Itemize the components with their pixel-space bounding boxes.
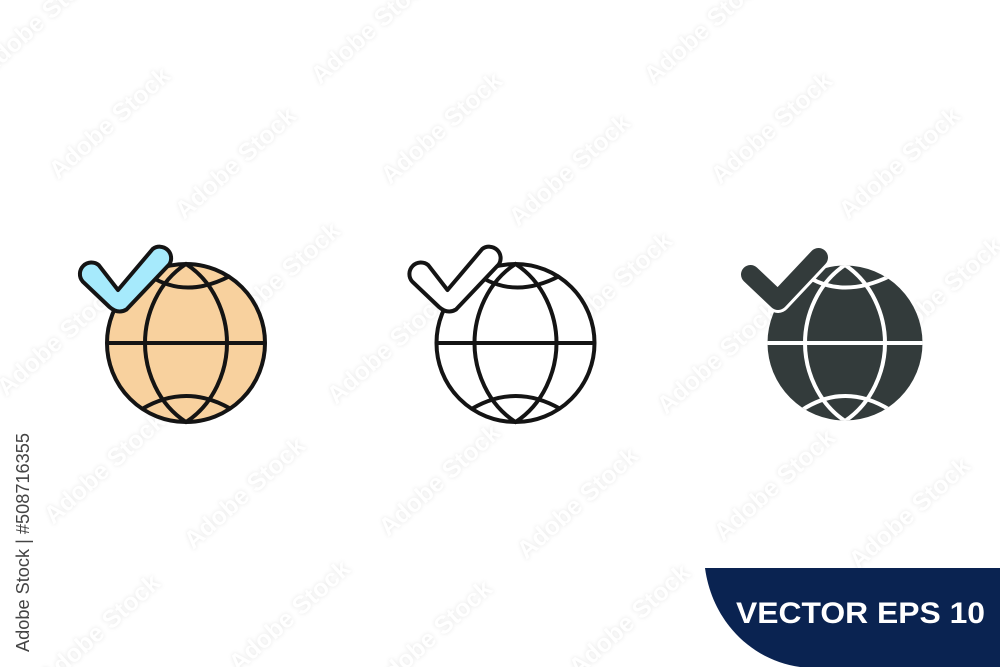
banner: vector eps 10: [705, 568, 1000, 667]
icon: solid globe with check mark: [750, 258, 925, 421]
text: Adobe Stock: [39, 406, 171, 530]
text: Adobe Stock: [652, 296, 784, 420]
text: Adobe Stock: [834, 101, 966, 225]
stock id side label: Adobe Stock | #508716355: [12, 433, 33, 652]
text: Adobe Stock: [214, 216, 346, 340]
text: Adobe Stock: [374, 418, 506, 542]
text: Adobe Stock: [709, 423, 841, 547]
text: Adobe Stock: [844, 451, 976, 575]
text: Adobe Stock: [322, 286, 454, 410]
text: Adobe Stock: [44, 61, 176, 185]
icon: outline globe with check mark: [409, 247, 594, 422]
banner: vector eps 10: VECTOR EPS 10: [736, 597, 985, 630]
text: Adobe Stock: [504, 108, 636, 232]
text: Adobe Stock: [706, 66, 838, 190]
text: Adobe Stock: [170, 101, 302, 225]
text: Adobe Stock: [512, 441, 644, 565]
text: Adobe Stock: [376, 66, 508, 190]
text: Adobe Stock: [546, 226, 678, 350]
icon: colored globe with check mark: [80, 247, 265, 422]
text: Adobe Stock: [179, 431, 311, 555]
